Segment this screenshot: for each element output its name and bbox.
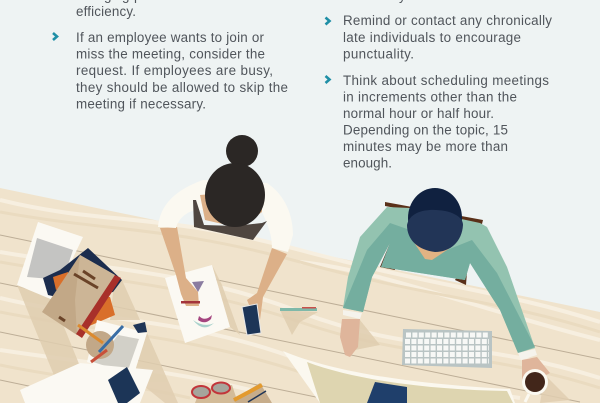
folder (42, 255, 115, 335)
left hand (340, 319, 360, 357)
notebook and pencil at bottom (233, 383, 272, 403)
orange pencil (78, 325, 103, 343)
blue pen (99, 326, 123, 352)
tip: join or miss the meeting (76, 30, 288, 112)
shadows on desk (17, 265, 570, 403)
tip: scheduling increments: minutes may be more than (343, 139, 508, 154)
stack of folders and books (42, 248, 122, 338)
glasses (192, 382, 238, 403)
keyboard (402, 329, 492, 368)
small pens on desk (280, 307, 317, 311)
tip: scheduling increments: enough. (343, 156, 392, 170)
bottom papers and tablet (20, 363, 153, 403)
woman white shirt (158, 180, 293, 252)
bullet chevron (326, 18, 330, 24)
chair sides (380, 243, 395, 270)
text column: right tips (326, 0, 552, 170)
tip: scheduling increments: in increments other than the (343, 90, 517, 104)
woman arm right (247, 248, 287, 320)
right cuff (518, 349, 537, 360)
text lines block (27, 238, 73, 280)
woman's phone (242, 304, 261, 335)
folder label (59, 271, 98, 321)
hair highlight (407, 210, 463, 252)
left cuff (343, 310, 362, 319)
drawing paper (165, 265, 230, 343)
tip: scheduling increments: Depending on the topic, 15 (343, 122, 508, 138)
bullet chevron (326, 76, 330, 83)
binder clip (133, 322, 147, 333)
green shirt shade (343, 223, 535, 353)
wooden desk (0, 188, 600, 403)
sketch marks (192, 281, 204, 292)
tip: remind late individuals: Remind or contact any chronically (343, 13, 552, 28)
man figure (340, 188, 550, 382)
tip: remind late individuals: late individuals to encourage (343, 30, 521, 45)
woman bare arm left (160, 227, 199, 306)
tip: scheduling increments: Think about scheduling meetings (343, 73, 549, 88)
folder darker fold (75, 255, 115, 335)
orange book right (87, 297, 115, 327)
tip: join or miss the meeting: meeting if necessary. (76, 96, 206, 112)
lower paper with cup (78, 320, 147, 377)
bullet chevron (53, 33, 57, 40)
text column: left tips: efficiency. (76, 4, 136, 19)
tip: join or miss the meeting: miss the meeting, consider the (76, 46, 265, 62)
text lines (90, 335, 139, 373)
right hand (522, 357, 550, 382)
cup circle (86, 331, 114, 359)
woman head hair (205, 163, 265, 227)
chair back bar (385, 202, 483, 224)
man hair (408, 188, 462, 248)
monitor screen (307, 362, 513, 403)
red pen (91, 350, 107, 362)
skin of shoulders (200, 190, 262, 228)
red pencil (181, 301, 200, 304)
dark tank top (193, 200, 267, 240)
tip: join or miss the meeting: request. If employees are busy, (76, 63, 273, 78)
orange book left (53, 272, 70, 290)
papers with text (17, 222, 83, 300)
tip: remind late individuals: punctuality. (343, 46, 414, 62)
woman figure (158, 135, 293, 320)
tablet (108, 367, 140, 403)
tip: scheduling increments: normal hour or half hour. (343, 106, 494, 121)
coffee cup (522, 369, 548, 402)
tip: join or miss the meeting: If an employee wants to join or (76, 30, 265, 45)
navy book (43, 248, 122, 300)
monitor stand item (367, 382, 407, 403)
neck (411, 238, 450, 260)
green shirt outer (343, 207, 535, 353)
woman hair bun (226, 135, 258, 167)
desktop monitor (283, 351, 515, 403)
tip: join or miss the meeting: they should be allowed to skip the (76, 80, 288, 95)
red spine (76, 275, 121, 338)
monitor white back (283, 351, 515, 403)
text column: left tips (53, 0, 288, 112)
tip: scheduling increments (343, 73, 549, 170)
tip: remind late individuals (343, 13, 552, 62)
